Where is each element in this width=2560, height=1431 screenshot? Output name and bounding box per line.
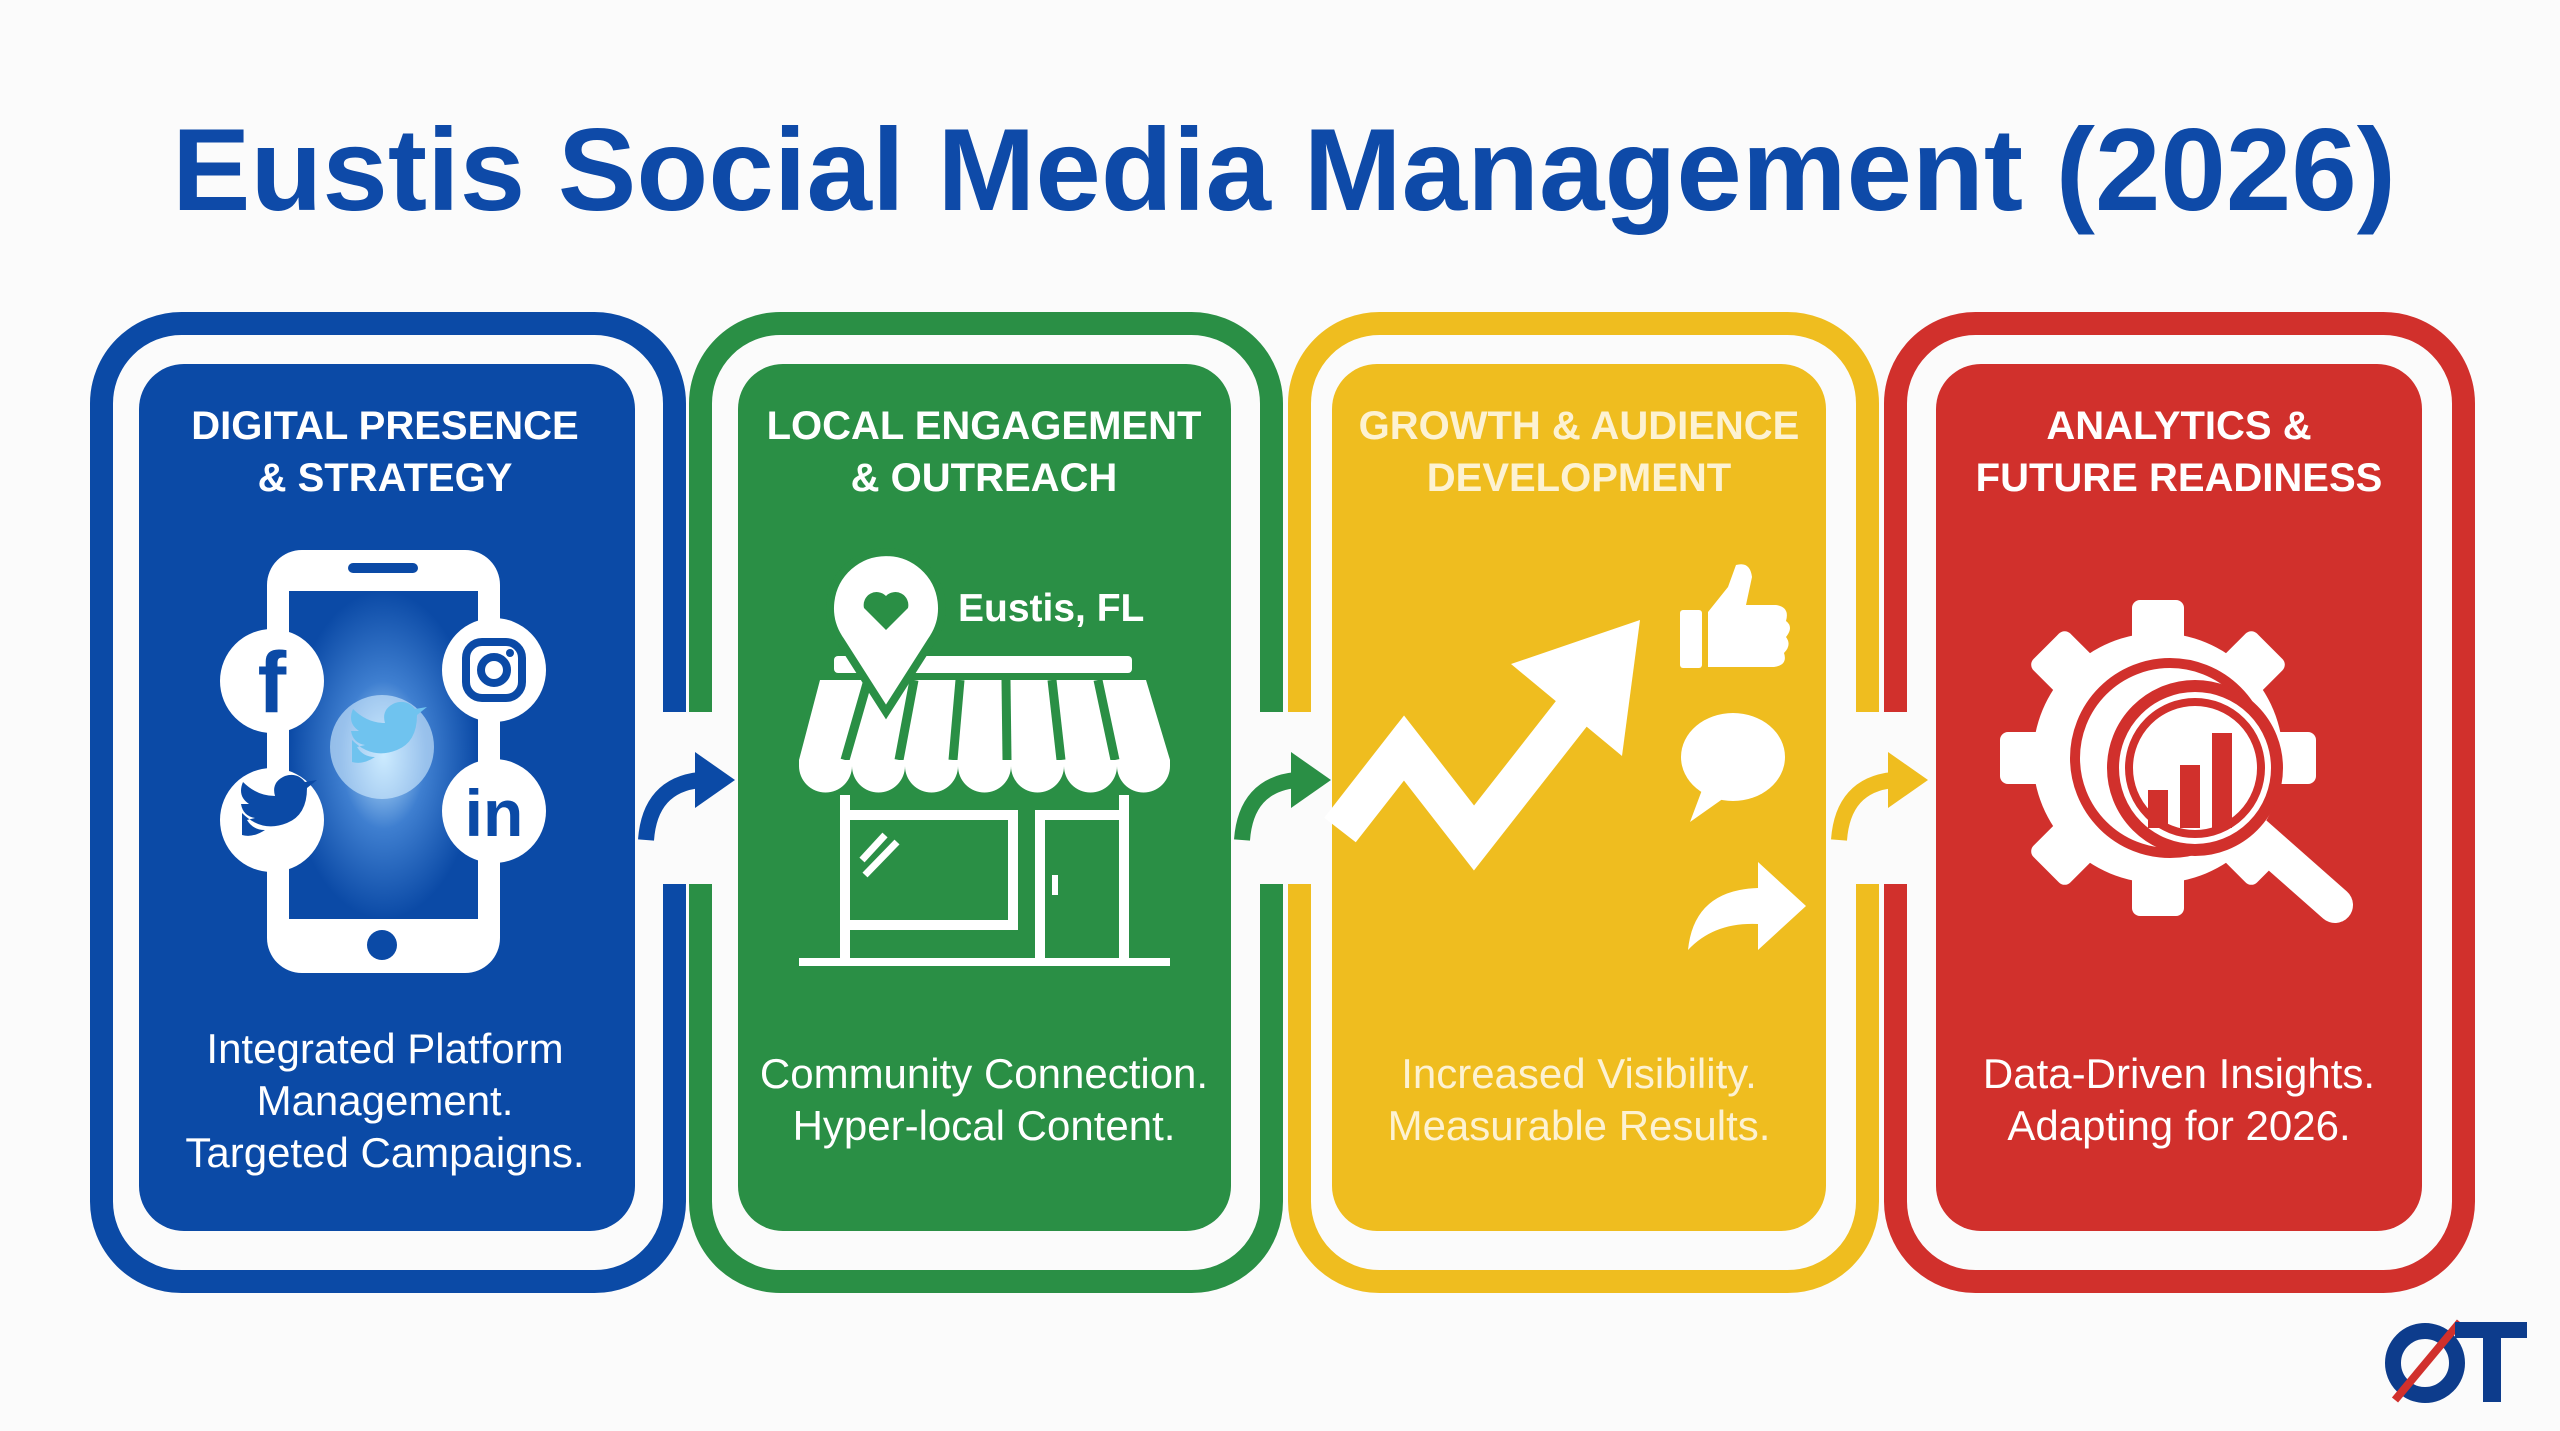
heading: digital presence: & STRATEGY bbox=[258, 456, 513, 500]
heading: growth: DEVELOPMENT bbox=[1427, 456, 1731, 500]
heading: analytics: FUTURE READINESS bbox=[1976, 456, 2382, 500]
heading: local engagement: & OUTREACH bbox=[851, 456, 1117, 500]
icon: phone with social bbox=[220, 550, 546, 973]
heading: digital presence: DIGITAL PRESENCE bbox=[191, 404, 579, 448]
panel: growth bbox=[1300, 324, 1868, 1282]
panel: digital presence bbox=[102, 324, 674, 1282]
text: digital presence body: Targeted Campaigns. bbox=[185, 1129, 585, 1176]
heading: local engagement: LOCAL ENGAGEMENT bbox=[767, 404, 1201, 448]
icon: storefront with pin: Eustis, FL bbox=[958, 587, 1144, 630]
panel: analytics bbox=[1896, 324, 2464, 1282]
text: growth body: Measurable Results. bbox=[1388, 1102, 1770, 1149]
icon: storefront with pin bbox=[799, 552, 1170, 966]
heading: analytics: ANALYTICS & bbox=[2046, 404, 2312, 448]
text: digital presence body: Management. bbox=[257, 1077, 513, 1124]
panel: local engagement bbox=[700, 324, 1272, 1282]
icon: phone with social: f bbox=[258, 635, 287, 731]
icon: share arrow bbox=[1688, 862, 1806, 950]
text: local engagement body: Hyper-local Content. bbox=[793, 1102, 1175, 1149]
heading: growth: GROWTH & AUDIENCE bbox=[1359, 404, 1799, 448]
text: growth body: Increased Visibility. bbox=[1401, 1050, 1757, 1097]
icon: gear with magnifier bbox=[2000, 600, 2335, 916]
icon: phone with social: in bbox=[465, 776, 523, 850]
icon: speech bubble bbox=[1681, 713, 1785, 822]
text: local engagement body: Community Connection. bbox=[760, 1050, 1208, 1097]
arrow: yellow to red bbox=[1839, 752, 1928, 840]
arrow: green to yellow bbox=[1242, 752, 1331, 840]
icon: growth arrow bbox=[1340, 620, 1640, 838]
arrow: blue to green bbox=[646, 752, 735, 840]
text: analytics body: Adapting for 2026. bbox=[2007, 1102, 2351, 1149]
title: Eustis Social Media Management (2026) bbox=[172, 104, 2396, 235]
text: analytics body: Data-Driven Insights. bbox=[1983, 1050, 2375, 1097]
text: digital presence body: Integrated Platform bbox=[206, 1025, 564, 1072]
logo bbox=[2393, 1322, 2527, 1402]
icon: thumbs up bbox=[1680, 564, 1790, 668]
